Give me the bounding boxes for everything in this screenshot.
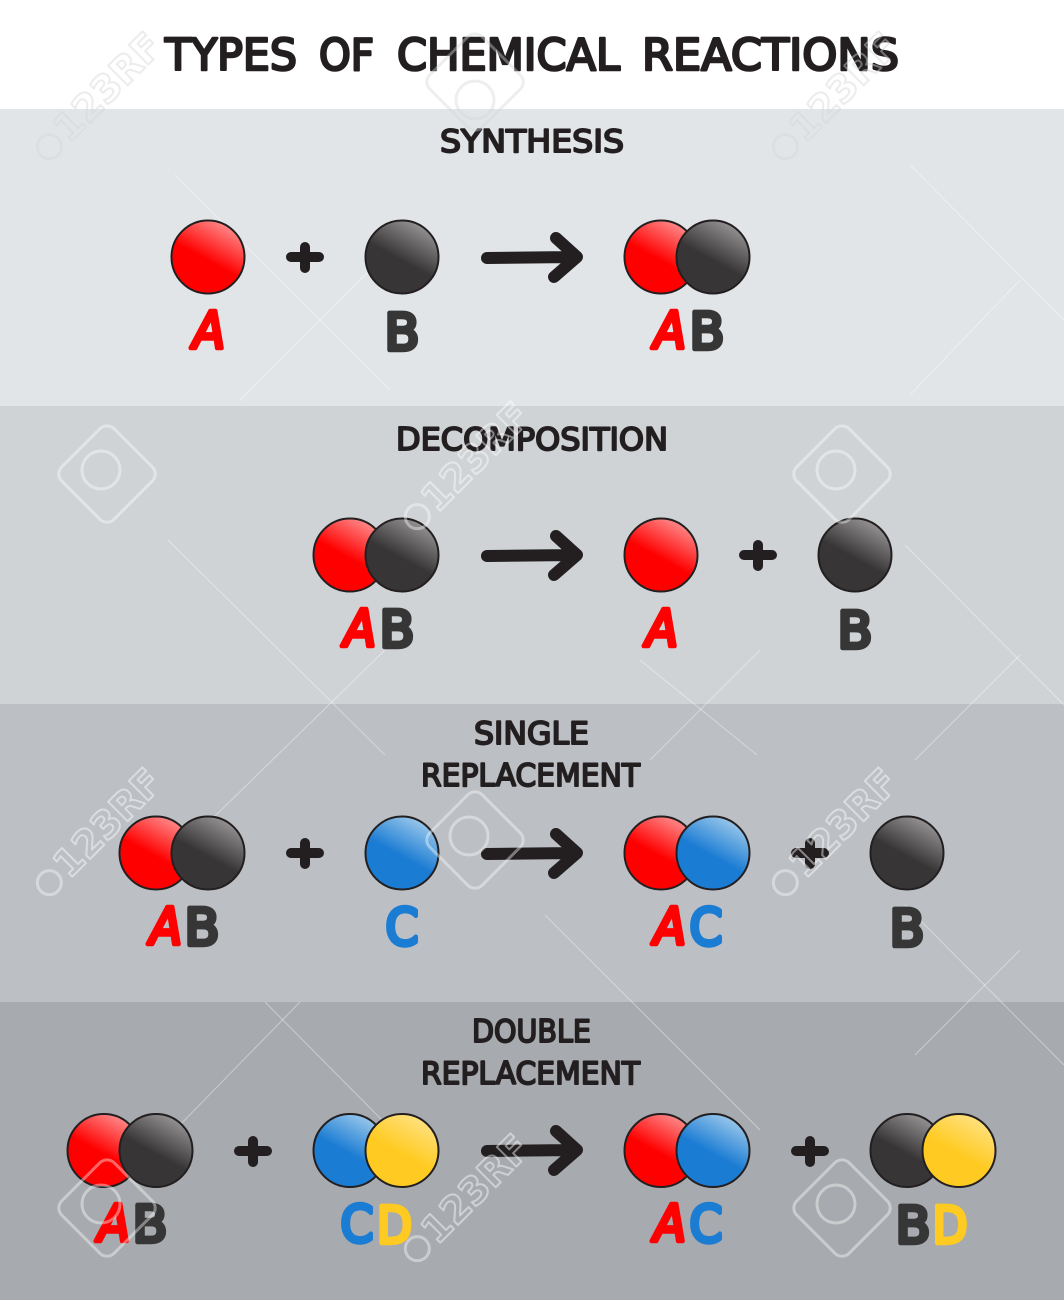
label AB	[341, 600, 414, 660]
reaction: double replacement	[68, 1114, 996, 1256]
label AC: C	[690, 1196, 722, 1255]
arrow	[487, 1131, 577, 1170]
reaction: single replacement	[120, 816, 944, 959]
arrow	[487, 536, 577, 575]
watermarks: 123RF	[44, 24, 171, 150]
label AB	[651, 302, 724, 362]
heading: decomposition: DECOMPOSITION	[396, 422, 668, 458]
molecule AB	[68, 1114, 192, 1187]
panel: synthesis background	[0, 109, 1064, 406]
heading: double replacement: DOUBLE	[472, 1014, 591, 1050]
atom A	[172, 220, 244, 294]
molecule AC	[624, 816, 750, 890]
atom B	[818, 518, 892, 592]
label BD: B	[896, 1197, 930, 1256]
label AB: A	[95, 1195, 130, 1254]
label C: C	[386, 899, 418, 958]
atom A	[624, 518, 698, 592]
label AB: B	[690, 303, 724, 362]
watermarks: 123RF	[412, 394, 539, 520]
label AC: A	[651, 898, 686, 957]
heading: synthesis: SYNTHESIS	[440, 124, 624, 160]
title: TYPES	[164, 30, 297, 81]
label CD	[340, 1196, 412, 1256]
arrow	[487, 834, 577, 873]
label AB	[147, 898, 220, 958]
molecule CD	[314, 1114, 438, 1187]
label B: B	[384, 304, 420, 363]
panel: double replacement background	[0, 1002, 1064, 1300]
label AB: B	[132, 1196, 168, 1255]
reaction: synthesis	[172, 220, 750, 363]
atom B	[366, 220, 438, 294]
watermarks	[25, 24, 907, 1272]
molecule AB	[624, 220, 750, 294]
watermarks: 123RF	[780, 760, 907, 886]
plus sign	[796, 1141, 824, 1162]
plus sign	[291, 843, 319, 864]
label CD: D	[377, 1197, 412, 1256]
label CD: C	[340, 1196, 374, 1255]
plus sign	[796, 843, 824, 864]
molecule AB	[314, 518, 438, 592]
label AB: A	[341, 600, 376, 659]
heading: single replacement: SINGLE	[474, 716, 589, 752]
label AC: C	[690, 899, 722, 958]
watermarks: 123RF	[412, 1126, 539, 1252]
plus sign	[239, 1141, 267, 1162]
title	[164, 30, 899, 81]
reaction: decomposition	[314, 518, 892, 661]
watermarks: 123RF	[44, 760, 171, 886]
molecule AC	[624, 1114, 750, 1187]
label AB: A	[147, 898, 182, 957]
plus sign	[744, 545, 772, 566]
panel: decomposition background	[0, 406, 1064, 704]
label A: A	[190, 302, 225, 361]
label AB: A	[651, 302, 686, 361]
watermarks: 123RF	[780, 24, 907, 150]
atom C	[366, 816, 438, 890]
label AB	[95, 1195, 168, 1255]
molecule AB	[120, 816, 244, 890]
title: CHEMICAL	[397, 30, 620, 81]
label AC	[651, 1195, 722, 1255]
label A: A	[643, 600, 678, 659]
molecule BD	[870, 1114, 996, 1187]
label AB: B	[184, 899, 220, 958]
label B: B	[890, 900, 924, 959]
label AC	[651, 898, 722, 958]
heading: single replacement: REPLACEMENT	[421, 758, 641, 794]
heading: single replacement	[421, 716, 641, 794]
title: OF	[319, 30, 374, 81]
arrow	[487, 238, 577, 277]
heading: double replacement: REPLACEMENT	[421, 1056, 641, 1092]
panel: single replacement background	[0, 704, 1064, 1002]
heading: double replacement	[421, 1014, 641, 1092]
atom B	[870, 816, 944, 890]
label BD	[896, 1197, 968, 1256]
plus sign	[291, 247, 319, 268]
label B: B	[838, 602, 872, 661]
title: REACTIONS	[642, 30, 899, 81]
label AB: B	[380, 601, 414, 660]
label BD: D	[932, 1197, 968, 1256]
label AC: A	[651, 1195, 686, 1254]
